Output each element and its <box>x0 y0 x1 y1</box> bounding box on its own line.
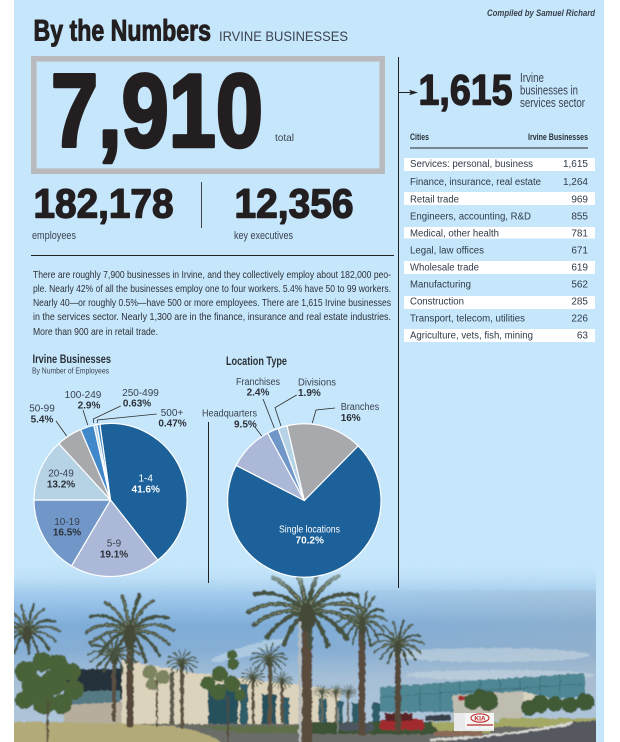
text block: summary paragraph: There are roughly 7,900 businesses in Irvine, and they collectively employ about 182,000 peo- <box>33 269 391 281</box>
table: businesses by sector: 1,615 <box>563 159 588 170</box>
text block: summary paragraph <box>33 269 391 338</box>
panel: total businesses: total <box>275 132 294 144</box>
pie chart: businesses by number of employees <box>34 423 187 576</box>
Kia sign: KIA <box>474 716 486 722</box>
table: businesses by sector: Finance, insurance, real estate <box>410 177 541 188</box>
table: businesses by sector: 619 <box>571 262 588 273</box>
pie labels: businesses by number of employees: 250-499 <box>122 388 159 399</box>
title: IRVINE BUSINESSES <box>219 28 348 44</box>
pie labels: location type: Headquarters <box>202 409 257 420</box>
pie labels: businesses by number of employees: 5-9 <box>107 539 122 550</box>
pie labels: businesses by number of employees: 41.6% <box>132 485 160 496</box>
pie labels: businesses by number of employees: 19.1% <box>100 550 128 561</box>
table: businesses by sector: 671 <box>571 245 588 256</box>
title: By the Numbers <box>34 14 211 48</box>
stat: services sector <box>418 66 585 114</box>
table: businesses by sector: Transport, telecom, utilities <box>410 313 525 324</box>
pie labels: businesses by number of employees: 0.47% <box>158 419 187 430</box>
stat: services sector: Irvine <box>520 70 544 85</box>
arrow to services count <box>398 90 418 95</box>
stat: employees: 182,178 <box>34 180 174 226</box>
pie labels: location type: Franchises <box>236 377 280 388</box>
pie labels: businesses by number of employees: 500+ <box>161 408 183 419</box>
pie labels: location type: Divisions <box>298 378 336 389</box>
credit line: Compiled by Samuel Richard <box>487 8 595 19</box>
pie labels: location type: 70.2% <box>296 535 324 546</box>
table: businesses by sector: Irvine Businesses <box>528 132 588 142</box>
pie labels: location type <box>202 377 379 546</box>
table: businesses by sector: Retail trade <box>410 194 459 206</box>
table: businesses by sector: 855 <box>571 212 588 222</box>
table: businesses by sector <box>404 132 595 342</box>
pie labels: businesses by number of employees: 5.4% <box>31 415 54 426</box>
pie labels: businesses by number of employees: 16.5% <box>53 528 81 539</box>
table: businesses by sector: 1,264 <box>563 177 588 188</box>
pie labels: businesses by number of employees: 0.63% <box>123 399 151 410</box>
pie labels: location type: Single locations <box>279 525 340 536</box>
table: businesses by sector: Cities <box>410 132 429 142</box>
text block: summary paragraph: in the services sector. Nearly 1,300 are in the finance, insurance and real estate industries. <box>33 311 391 323</box>
pie labels: location type: Branches <box>341 402 379 413</box>
table: businesses by sector: Medical, other health <box>410 228 499 239</box>
table: businesses by sector: 969 <box>571 194 588 206</box>
pie labels: businesses by number of employees <box>29 388 187 561</box>
pie labels: location type: 2.4% <box>247 388 270 399</box>
table: businesses by sector: 562 <box>571 279 588 290</box>
pie labels: businesses by number of employees: 2.9% <box>78 400 101 412</box>
table: businesses by sector: Legal, law offices <box>410 245 484 256</box>
text block: summary paragraph: More than 900 are in retail trade. <box>33 326 158 338</box>
stat: services sector: businesses in <box>520 82 578 98</box>
Kia sign <box>454 713 494 731</box>
pie labels: businesses by number of employees: 10-19 <box>54 517 80 528</box>
heading: Location Type chart: Location Type <box>226 356 287 368</box>
table: businesses by sector: Wholesale trade <box>410 262 479 273</box>
table: businesses by sector: Manufacturing <box>410 279 471 290</box>
heading: Irvine Businesses chart: Irvine Businesses <box>32 354 111 366</box>
pie labels: businesses by number of employees: 50-99 <box>29 404 55 415</box>
table: businesses by sector: Engineers, accounting, R&D <box>410 212 531 222</box>
pie labels: location type: 16% <box>341 413 361 424</box>
text block: summary paragraph: Nearly 40—or roughly 0.5%—have 500 or more employees. There are 1,615 Irvine businesses <box>33 297 391 309</box>
pie labels: location type: 9.5% <box>234 420 257 431</box>
table: businesses by sector: Construction <box>410 296 464 307</box>
stat: employees: employees <box>32 230 76 242</box>
pie labels: businesses by number of employees: 1-4 <box>138 474 153 485</box>
photo: Kia office campus with palm trees <box>14 573 596 742</box>
heading: Irvine Businesses chart: By Number of Employees <box>32 366 109 376</box>
table: businesses by sector: 285 <box>571 296 588 307</box>
panel: total businesses: 7,910 <box>51 54 263 170</box>
table: businesses by sector: 226 <box>571 313 588 324</box>
pie labels: businesses by number of employees: 20-49 <box>48 469 74 480</box>
pie labels: businesses by number of employees: 13.2% <box>47 480 75 491</box>
table: businesses by sector: Services: personal, business <box>410 159 533 170</box>
stat: services sector: 1,615 <box>418 66 512 114</box>
table: businesses by sector: 63 <box>577 330 588 341</box>
text block: summary paragraph: ple. Nearly 42% of all the businesses employ one to four workers. 5.4% have 50 to 99 workers. <box>33 283 391 295</box>
stat: key executives: key executives <box>234 230 293 242</box>
stat: services sector: services sector <box>520 95 585 110</box>
pie labels: businesses by number of employees: 100-249 <box>65 390 102 401</box>
table: businesses by sector: 781 <box>571 228 588 239</box>
pie chart: location type <box>228 424 381 577</box>
pie labels: location type: 1.9% <box>298 388 321 399</box>
table: businesses by sector: Agriculture, vets, fish, mining <box>410 330 533 341</box>
heading: Irvine Businesses chart <box>32 354 111 376</box>
stat: key executives: 12,356 <box>234 180 354 226</box>
